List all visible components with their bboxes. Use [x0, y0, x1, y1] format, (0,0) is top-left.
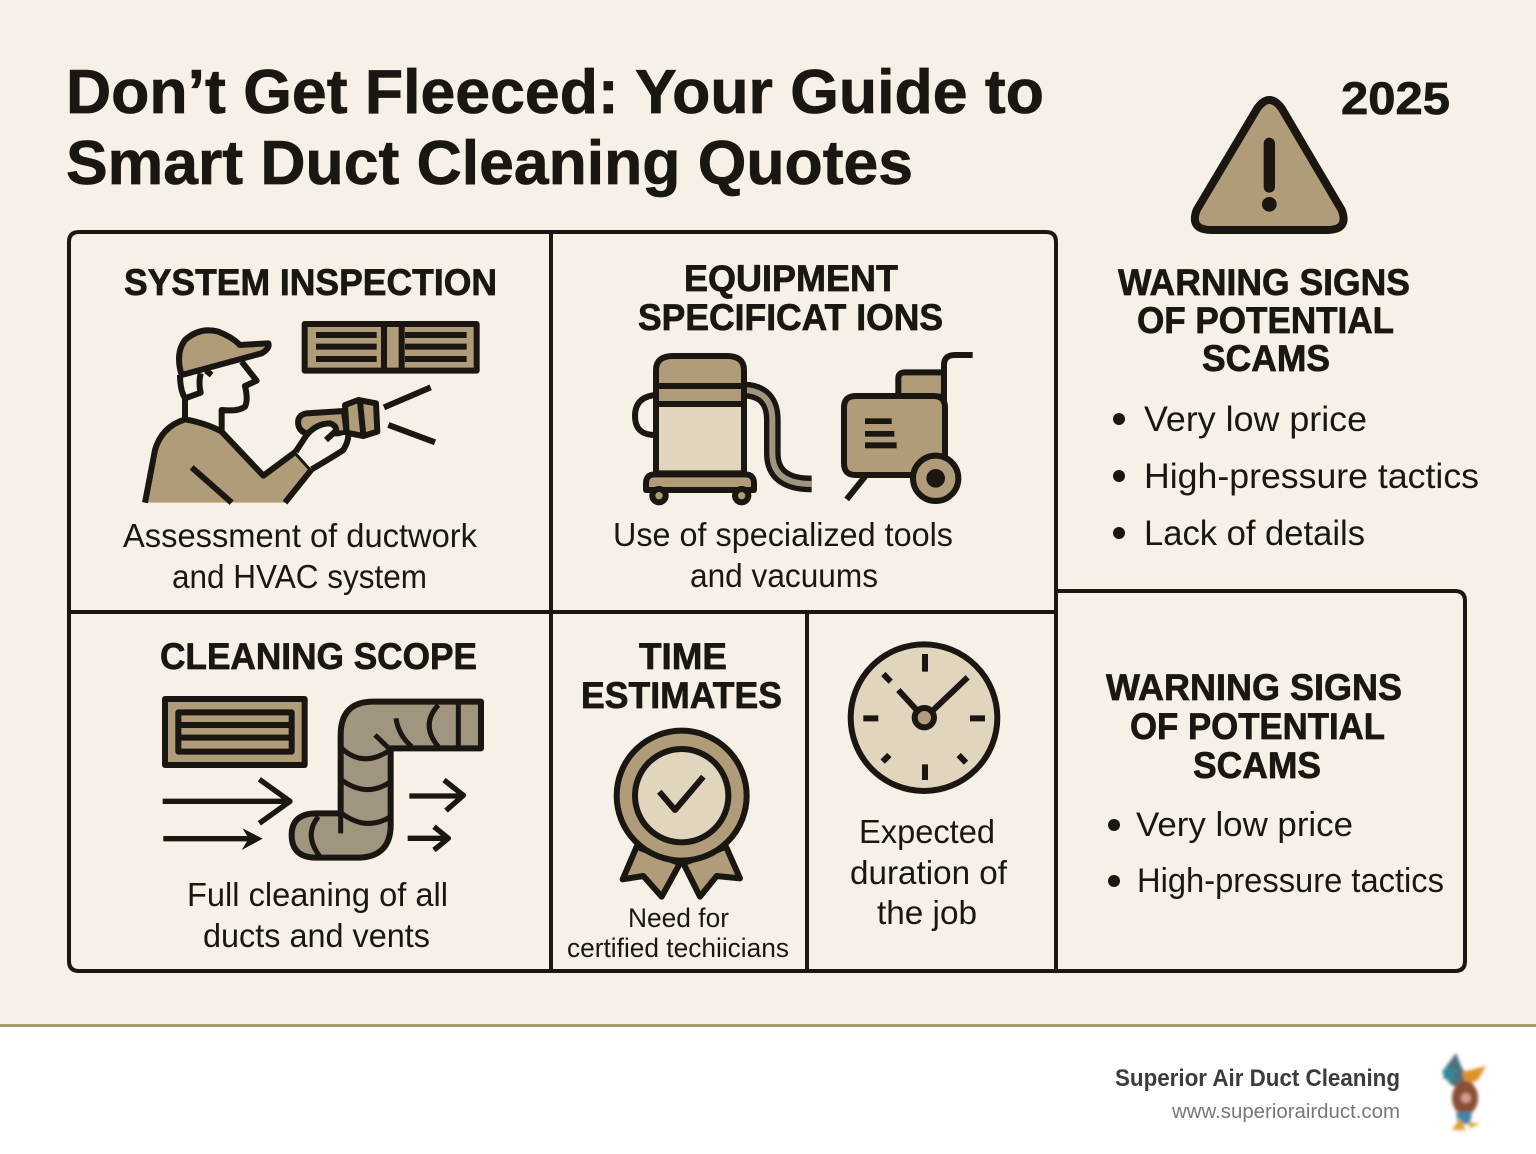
- description: system inspection: Assessment of ductwork: [123, 517, 477, 554]
- heading: time estimates: TIME: [639, 636, 727, 677]
- panel: warning signs lower: [1106, 667, 1444, 900]
- icon: technician with flashlight inspecting vent: [145, 323, 477, 503]
- icon: mascot: [1442, 1053, 1486, 1130]
- heading: equipment specifications: SPECIFICAT IONS: [638, 297, 943, 338]
- title: [66, 58, 1044, 198]
- bullet list: warning signs upper: Very low price: [1144, 400, 1367, 439]
- bullet list: warning signs upper: High-pressure tactics: [1144, 457, 1479, 496]
- description: cleaning scope: [187, 876, 448, 954]
- icon: shop vacuum and cart machine: [635, 355, 973, 502]
- panel: cleaning scope: [160, 636, 481, 954]
- heading: warning signs lower: [1106, 667, 1402, 786]
- panel: warning signs upper: [1113, 262, 1479, 553]
- heading: time estimates: ESTIMATES: [581, 675, 782, 716]
- heading: equipment specifications: EQUIPMENT: [684, 258, 898, 299]
- bullet list: warning signs lower: High-pressure tactics: [1137, 862, 1444, 900]
- description: certified technicians: [567, 903, 789, 963]
- description: equipment specifications: [613, 516, 953, 594]
- footer website: www.superiorairduct.com: [1171, 1101, 1400, 1123]
- heading: warning signs upper: SCAMS: [1202, 338, 1330, 379]
- heading: equipment specifications: [638, 258, 943, 338]
- description: cleaning scope: ducts and vents: [203, 917, 430, 954]
- heading: warning signs upper: WARNING SIGNS: [1118, 262, 1410, 303]
- description: certified technicians: certified techiicians: [567, 933, 789, 963]
- bullet list: warning signs upper: Lack of details: [1144, 514, 1365, 553]
- description: system inspection: [123, 517, 477, 595]
- description: expected duration: [850, 813, 1008, 931]
- heading: warning signs upper: OF POTENTIAL: [1137, 300, 1394, 341]
- description: equipment specifications: Use of specialized tools: [613, 516, 953, 553]
- heading: warning signs lower: OF POTENTIAL: [1130, 706, 1385, 747]
- panel: equipment specifications: [613, 258, 973, 594]
- description: system inspection: and HVAC system: [172, 558, 427, 595]
- description: equipment specifications: and vacuums: [690, 557, 878, 594]
- description: cleaning scope: Full cleaning of all: [187, 876, 448, 913]
- title: Don’t Get Fleeced: Your Guide to: [66, 58, 1044, 127]
- panel: expected duration: [850, 644, 1008, 931]
- footer brand name: Superior Air Duct Cleaning: [1115, 1065, 1400, 1092]
- description: expected duration: duration of: [850, 854, 1008, 891]
- year label: 2025: [1341, 73, 1450, 124]
- description: expected duration: the job: [877, 894, 977, 931]
- heading: warning signs lower: WARNING SIGNS: [1106, 667, 1402, 708]
- icon: clock: [851, 644, 997, 791]
- footer: [0, 1024, 1536, 1154]
- heading: warning signs upper: [1118, 262, 1410, 379]
- heading: warning signs lower: SCAMS: [1193, 745, 1321, 786]
- description: certified technicians: Need for: [628, 903, 729, 933]
- bullet list: warning signs lower: Very low price: [1136, 806, 1353, 844]
- panel: system inspection: [123, 262, 497, 595]
- grid frame: [69, 232, 1465, 971]
- heading: time estimates: [581, 636, 782, 716]
- bullet list: warning signs lower: [1108, 806, 1444, 900]
- title: Smart Duct Cleaning Quotes: [66, 129, 913, 198]
- icon: vent, flexible duct and airflow arrows: [163, 699, 481, 858]
- description: expected duration: Expected: [859, 813, 995, 850]
- icon: warning triangle: [1195, 100, 1344, 230]
- heading: cleaning scope: CLEANING SCOPE: [160, 636, 477, 677]
- icon: certified medal: [617, 731, 747, 897]
- bullet list: warning signs upper: [1113, 400, 1479, 553]
- heading: system inspection: SYSTEM INSPECTION: [124, 262, 497, 303]
- panel: time estimates and certification: [567, 636, 789, 963]
